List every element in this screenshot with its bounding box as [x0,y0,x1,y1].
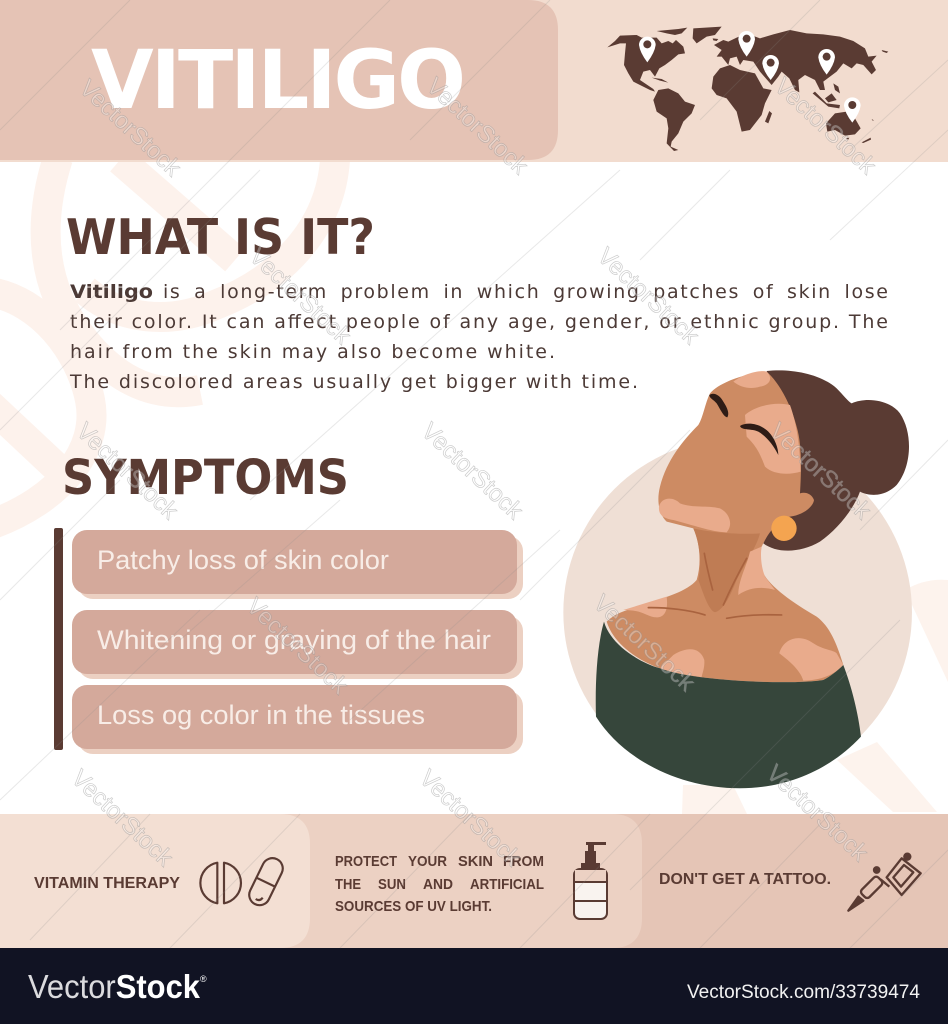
watermark: VectorStock [761,760,874,867]
tip: vitamin therapy: VITAMIN THERAPY [34,875,180,892]
heading: what is it: WHAT IS IT? [66,209,375,266]
tip: tattoo: DON'T GET A TATTOO. [659,871,831,888]
closed eye [740,424,778,455]
symptom 1: Patchy loss of skin color [97,545,389,575]
neck shadow [693,528,760,612]
header band [0,0,948,162]
icon: tattoo machine [848,854,921,911]
watermark: VectorStock [416,418,529,525]
footer bar [0,948,948,1024]
description text: hair from the skin may also become white. [70,341,555,363]
tip: protect skin: SOURCES OF UV LIGHT. [335,898,492,915]
tip: protect skin: SKIN [458,853,493,870]
pin: Middle East [762,55,779,80]
watermark: VectorStock [74,75,187,182]
title: VITILIGO [91,34,466,128]
watermark: VectorStock [764,418,877,525]
symptom 2 [72,610,523,679]
watermark: VectorStock [241,593,354,700]
watermark: VectorStock [769,73,882,180]
watermark: VectorStock [71,418,184,525]
watermark: VectorStock [592,243,705,350]
description text: their color. It can affect people of any age, gender, or ethnic group. The [70,311,888,333]
eyebrow [709,394,728,417]
description text [69,281,888,393]
hair [763,370,909,551]
watermark: VectorStock [244,243,357,350]
tip: protect skin: AND [423,876,453,893]
watermark: VectorStock [66,765,179,872]
pin: Australia [844,97,861,123]
tip: protect skin [335,853,544,915]
footer logo: VectorStock [28,968,201,1005]
symptoms list [54,528,523,754]
description text: Vitiligo [70,281,153,303]
world map with pins [607,27,888,151]
footer registered mark: ® [200,974,207,984]
earring [771,516,797,541]
heading: symptoms: SYMPTOMS [62,450,349,506]
pin: East Asia [818,49,835,75]
tip: protect skin: THE [335,876,361,893]
icon: tablet and capsule [200,855,286,909]
tip: protect skin: ARTIFICIAL [470,876,544,893]
symptom 2: Whitening or graying of the hair [97,625,491,655]
bottom tips band [0,814,948,948]
tip: protect skin: PROTECT [335,853,397,870]
tip: protect skin: SUN [378,876,406,893]
symptom 1 [72,530,523,599]
title panel [0,0,558,160]
icon: lotion bottle [574,842,607,919]
watermark: VectorStock [588,590,701,697]
shirt [596,622,861,788]
description text: The discolored areas usually get bigger with time. [69,371,638,393]
pin: North America [639,37,656,62]
description text: is a long-term problem in which growing patches of skin lose [163,281,888,303]
watermark: VectorStock [414,765,527,872]
watermark: VectorStock [421,73,534,180]
footer url: VectorStock.com/33739474 [687,982,920,1003]
symptom 3: Loss og color in the tissues [97,700,425,730]
symptom 3 [72,685,523,754]
tip: protect skin: YOUR [408,853,447,870]
pin: Europe [738,31,755,57]
tip: protect skin: FROM [503,853,544,870]
skin [607,372,843,682]
illustration: woman with vitiligo [563,370,912,788]
